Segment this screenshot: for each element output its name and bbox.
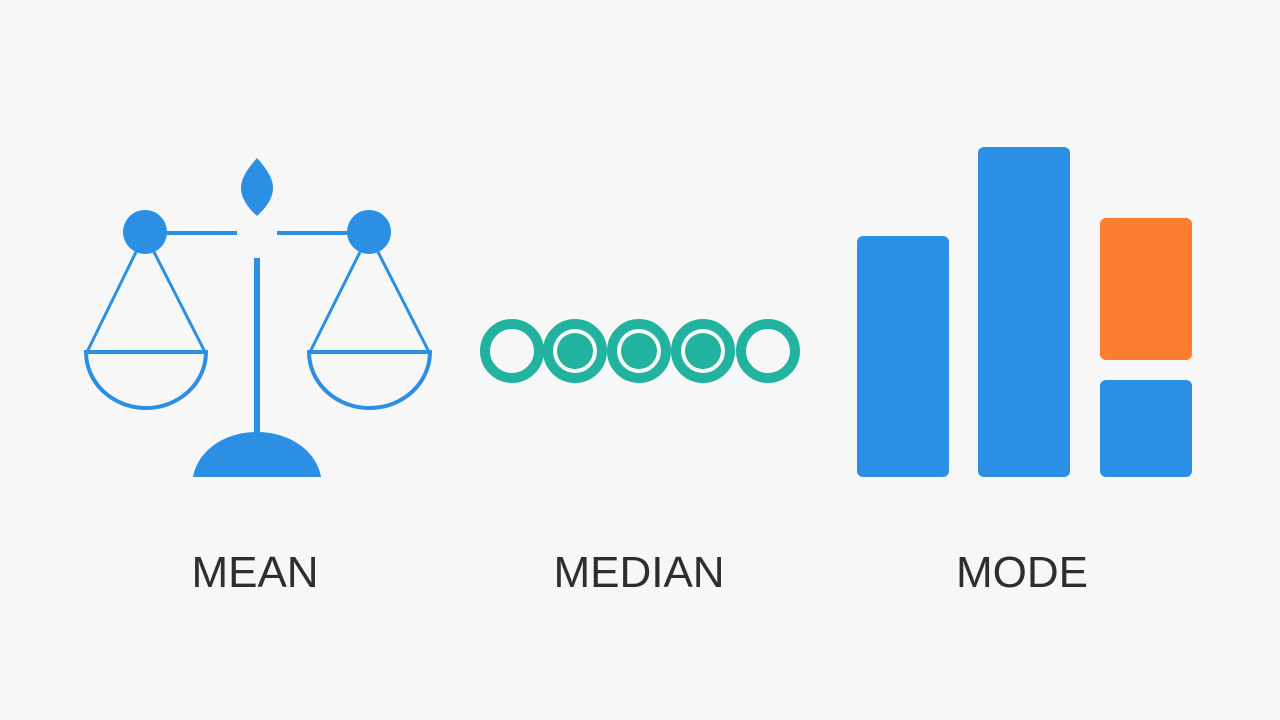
label: mode: MODE (956, 548, 1088, 597)
chart: mode bars (857, 147, 1192, 477)
label: mean: MEAN (191, 548, 319, 597)
icon: median circles (485, 324, 795, 378)
label: median: MEDIAN (553, 548, 725, 597)
flame (241, 158, 273, 216)
